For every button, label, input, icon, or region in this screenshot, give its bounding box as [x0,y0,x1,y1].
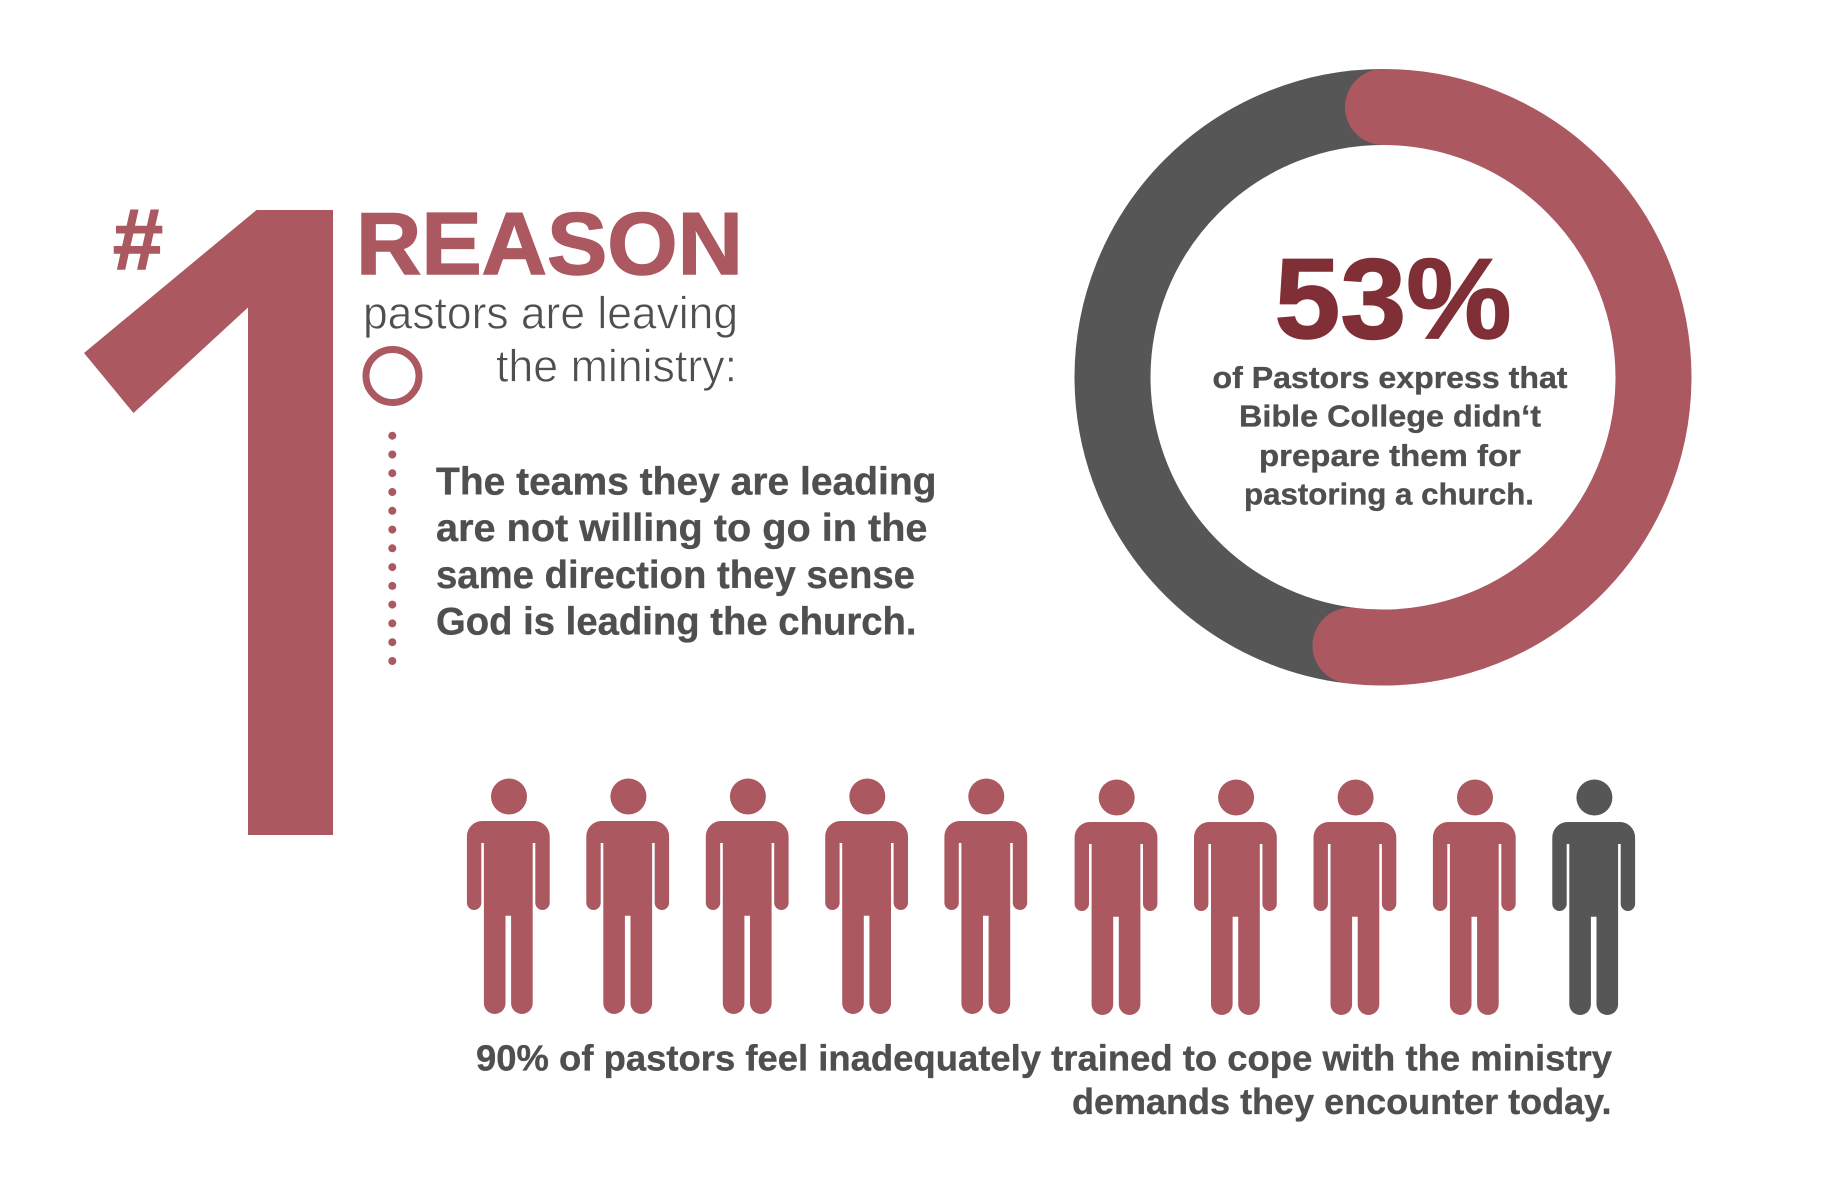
donut caption: pastoring a church. [1244,478,1534,512]
heading: reason: REASON [356,194,743,293]
text block: the teams they are leading: are not willing to go in the [436,507,928,550]
text block: the teams they are leading: same direction they sense [436,554,915,597]
person 6 [1075,780,1157,1015]
track [1112,107,1383,646]
text block: the teams they are leading: The teams they are leading [436,461,936,504]
stat: 53%: 53% [1274,236,1512,363]
person 1 [467,778,550,1014]
caption: 90% of pastors [476,1038,1612,1122]
dotted connector [388,432,396,665]
person 7 [1194,780,1277,1015]
donut caption: of Pastors express that [1212,361,1568,395]
person 9 [1433,780,1516,1015]
hash sign: # [113,192,163,288]
person 5 [944,778,1027,1014]
person 2 [586,778,669,1014]
donut chart: 53 percent [1112,107,1654,647]
text block: the teams they are leading: God is leading the church. [436,600,916,643]
big numeral one with hash [84,192,333,835]
person 4 [825,778,908,1014]
person 10 grey [1552,780,1635,1015]
subheading: pastors are leaving the ministry: pastors are leaving [363,287,738,338]
53 percent arc [1350,107,1654,647]
numeral 1 shape [84,210,333,835]
person 8 [1314,780,1396,1015]
donut caption: Bible College didn‘t [1239,400,1541,434]
person 3 [706,778,789,1014]
subheading: pastors are leaving the ministry: the ministry: [496,341,737,392]
caption: 90% of pastors: 90% of pastors feel inadequately trained to cope with the ministry [476,1038,1612,1079]
caption: 90% of pastors: demands they encounter today. [1072,1081,1612,1122]
text block: the teams they are leading [436,461,936,643]
ring marker [366,350,419,402]
donut caption [1212,361,1568,512]
subheading: pastors are leaving the ministry [363,287,738,392]
donut caption: prepare them for [1259,439,1521,473]
pictogram: 9 of 10 pastors [467,778,1635,1015]
